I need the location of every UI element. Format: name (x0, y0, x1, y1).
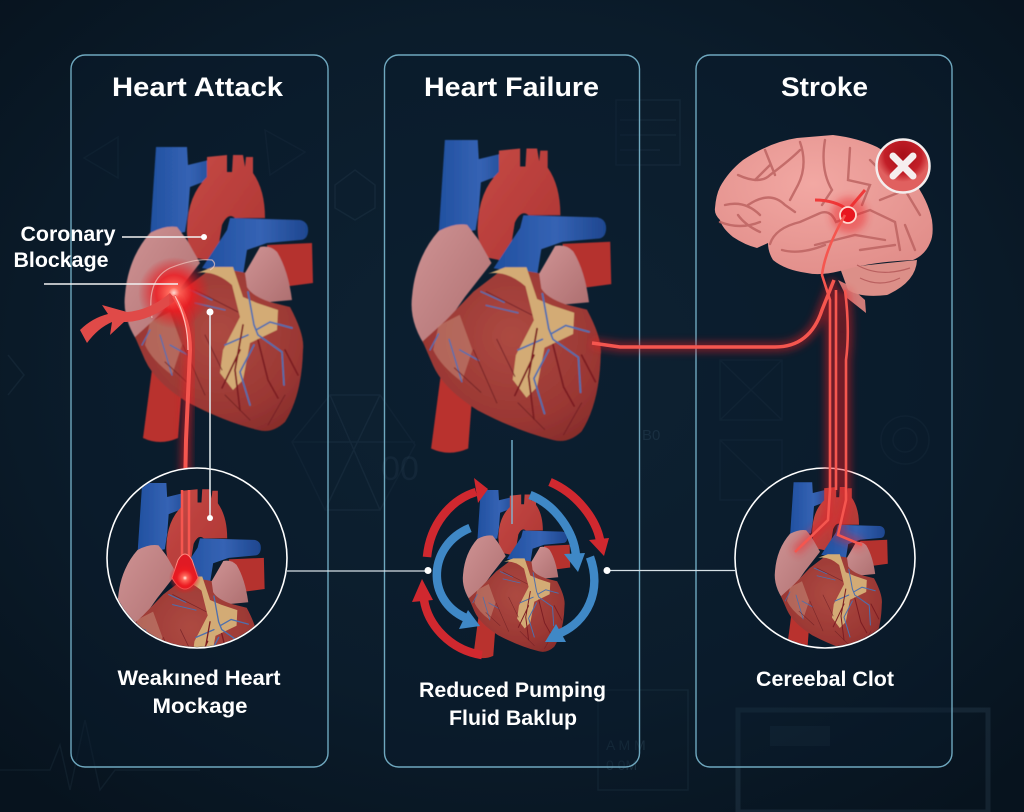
panel: stroke (696, 55, 952, 767)
glowing connection lines to brain (592, 215, 862, 552)
illustration: heart failure heart (412, 140, 611, 453)
artery outline around blockage (151, 260, 215, 318)
connector: panel 1 to panel 2 (287, 567, 432, 574)
text: 00 (381, 450, 419, 488)
blockage glow (138, 257, 210, 329)
heading: heart failure: Heart Failure (424, 72, 599, 102)
small heart (463, 490, 570, 658)
connector: panel 2 to panel 3 (604, 567, 736, 574)
caption: weakened heart: Weakıned Heart (118, 667, 281, 690)
caption: weakened heart (118, 667, 281, 718)
red inflow arrow (80, 293, 176, 343)
heading: stroke: Stroke (781, 72, 868, 102)
text: 0 0M (606, 757, 637, 773)
pumping cycle (412, 478, 609, 658)
text: A M M (606, 737, 646, 753)
panel: heart failure (384, 55, 640, 767)
illustration: brain (715, 135, 933, 313)
illustration: small heart in stroke circle (735, 468, 915, 659)
caption: reduced pumping (419, 679, 606, 730)
zoom circle: weakened heart (106, 467, 288, 649)
connector: heart failure vertical line (511, 440, 513, 524)
panel: heart attack (71, 55, 328, 767)
caption: reduced pumping: Fluid Baklup (449, 707, 577, 730)
label: coronary blockage: Coronary (20, 223, 116, 246)
caption: weakened heart: Mockage (152, 695, 248, 718)
glowing artery line (174, 296, 190, 490)
red X badge (876, 140, 930, 192)
text: B0 (642, 427, 660, 444)
brain artery and clot (815, 190, 865, 210)
label: coronary blockage (14, 223, 207, 284)
heading: heart attack: Heart Attack (112, 72, 284, 102)
label: coronary blockage: Blockage (14, 249, 108, 272)
connector: weakened heart (206, 308, 214, 521)
illustration: heart attack heart (80, 147, 313, 490)
caption: cerebral clot: Cereebal Clot (756, 668, 894, 691)
caption: reduced pumping: Reduced Pumping (419, 679, 606, 702)
